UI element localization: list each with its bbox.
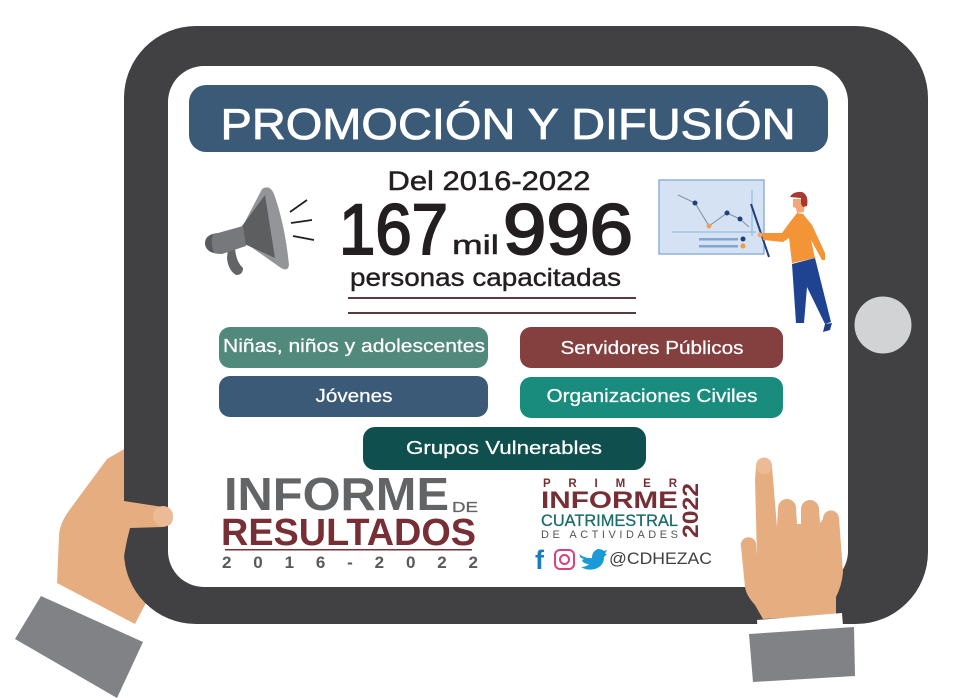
subtitle: personas capacitadas [350, 264, 621, 292]
head [793, 199, 805, 213]
title text: PROMOCIÓN Y DIFUSIÓN [220, 100, 796, 149]
icon: twitter [579, 549, 607, 570]
thumb nail [153, 506, 173, 526]
pill: Jóvenes: Jóvenes [316, 386, 392, 406]
logo: Informe de Resultados: RESULTADOS [221, 512, 476, 554]
big number: mil [452, 230, 499, 260]
big number: 167 [339, 191, 448, 270]
double rule [348, 297, 636, 314]
pill: Jóvenes [219, 376, 488, 417]
pill: Organizaciones Civiles: Organizaciones Civiles [546, 386, 758, 406]
big number [339, 191, 633, 270]
date text: Del 2016-2022 [388, 166, 590, 196]
icon: megaphone [205, 187, 314, 275]
icon: instagram [555, 550, 574, 569]
left hand palm [57, 448, 150, 624]
pill: Grupos Vulnerables: Grupos Vulnerables [406, 437, 602, 458]
sweater [762, 213, 825, 263]
pill: Niñas, niños y adolescentes [219, 327, 488, 368]
logo: Informe de Resultados [221, 468, 478, 572]
logo: Informe de Resultados: 2 0 1 6 - 2 0 2 2 [222, 553, 478, 572]
chart line [678, 195, 749, 227]
logo: Primer Informe Cuatrimestral: 2022 [678, 483, 703, 538]
chart board [659, 180, 764, 254]
pill: Niñas, niños y adolescentes: Niñas, niños y adolescentes [223, 336, 485, 356]
pill: Grupos Vulnerables [363, 427, 646, 470]
pill: Organizaciones Civiles [520, 377, 783, 418]
tablet home button [854, 296, 912, 354]
pill: Servidores Públicos [520, 327, 783, 368]
icon: facebook: f [535, 545, 545, 575]
social icons and handle [535, 545, 712, 575]
trousers [792, 258, 831, 324]
right hand [741, 458, 843, 619]
tablet screen [168, 66, 848, 587]
right sleeve [749, 627, 855, 682]
illustration: presenter with chart [659, 180, 832, 332]
tablet body [124, 26, 928, 624]
finger nail [756, 458, 772, 474]
left hand thumb [118, 501, 173, 556]
left sleeve [15, 596, 143, 698]
logo: Primer Informe Cuatrimestral: INFORME [541, 487, 678, 514]
handle: @CDHEZAC [609, 550, 712, 568]
title banner [189, 85, 828, 152]
pill: Servidores Públicos: Servidores Públicos [560, 338, 744, 358]
logo: Informe de Resultados: DE [452, 499, 478, 516]
logo: Primer Informe Cuatrimestral [541, 478, 703, 541]
logo: Informe de Resultados: INFORME [224, 468, 449, 520]
logo: Primer Informe Cuatrimestral: DE ACTIVIDADES [541, 529, 678, 541]
right cuff [757, 613, 843, 634]
logo: Primer Informe Cuatrimestral: CUATRIMESTRAL [541, 511, 678, 530]
big number: 996 [503, 191, 633, 270]
chart legend [699, 238, 738, 240]
pointer [751, 204, 769, 257]
logo: Primer Informe Cuatrimestral: P R I M E R [543, 478, 678, 490]
